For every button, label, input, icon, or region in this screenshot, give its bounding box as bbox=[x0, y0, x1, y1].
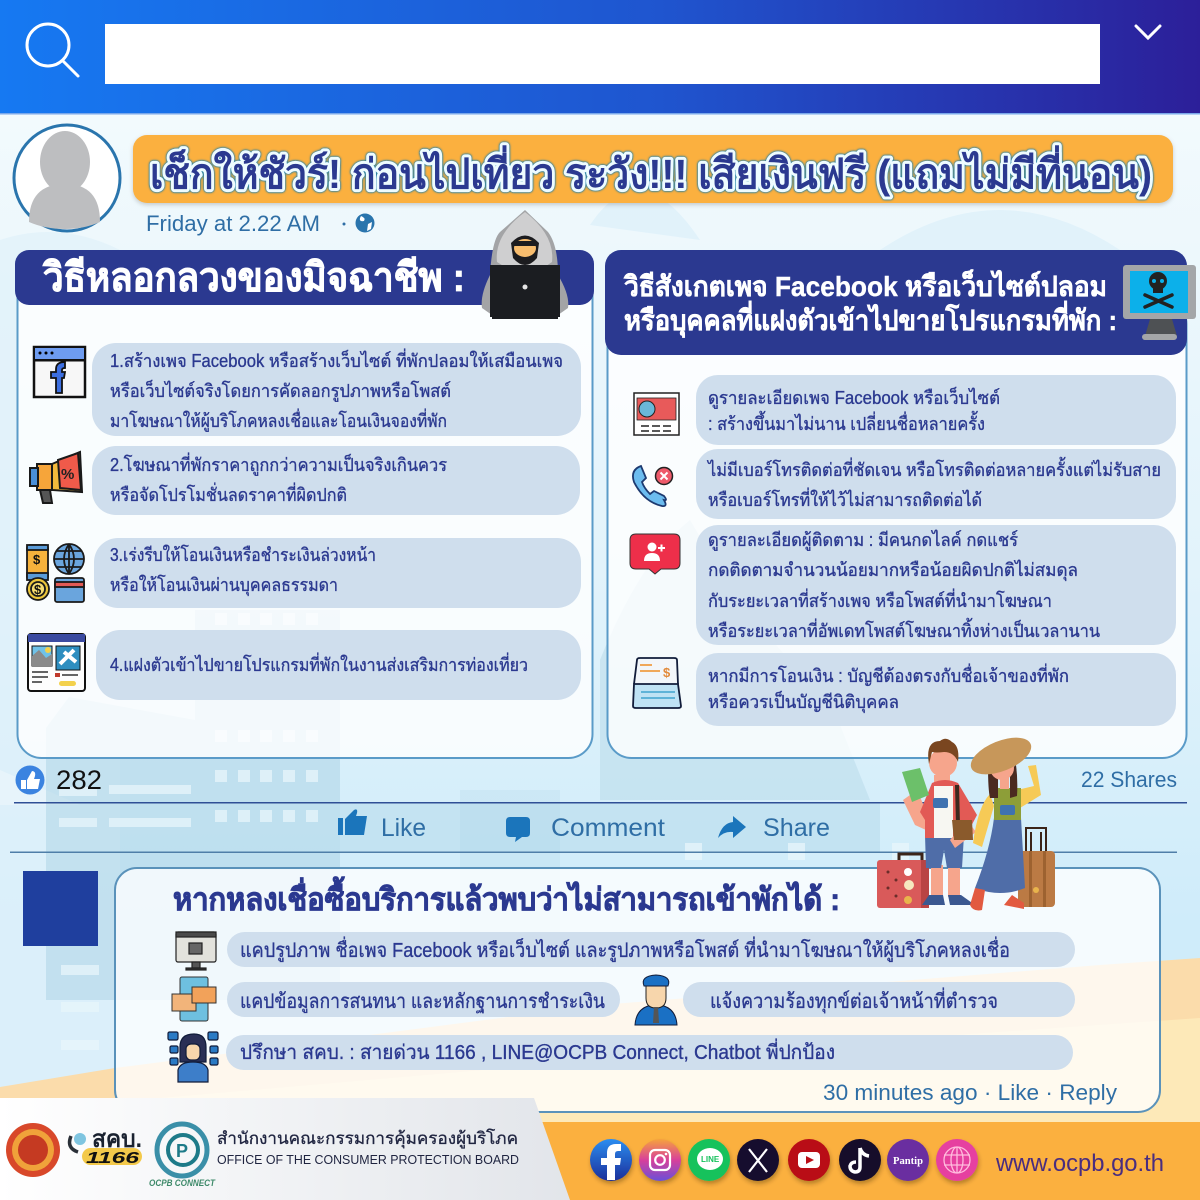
logo: OCPB connect: OCPB CONNECT bbox=[149, 1178, 216, 1188]
step: consult OCPB bbox=[168, 1032, 1073, 1082]
icon: magnifier bbox=[27, 24, 78, 76]
icon: megaphone bbox=[30, 452, 82, 503]
brown suitcase bbox=[1018, 828, 1055, 907]
step: capture images: แคปรูปภาพ ชื่อเพจ Facebook หรือเว็บไซต์ และรูปภาพหรือโพสต์ ที่นำมาโฆษณาให้ผู้บริโภคหลงเชื่อ bbox=[240, 936, 1010, 963]
step: consult OCPB: ปรึกษา สคบ. : สายด่วน 1166 , LINE@OCPB Connect, Chatbot พี่ปกป้อง bbox=[240, 1038, 835, 1064]
item 3: กับระยะเวลาที่สร้างเพจ หรือโพสต์ที่นำมาโฆษณา bbox=[708, 588, 1052, 611]
icon: x bbox=[737, 1139, 779, 1181]
item 3: หรือให้โอนเงินผ่านบุคคลธรรมดา bbox=[110, 574, 338, 596]
agency name bbox=[217, 1128, 519, 1167]
footer: agency strip bbox=[0, 1098, 570, 1200]
action: like bbox=[338, 809, 426, 842]
title banner bbox=[133, 135, 1173, 203]
icon: facebook page bbox=[34, 347, 85, 397]
item 1: มาโฆษณาให้ผู้บริโภคหลงเชื่อและโอนเงินจองที่พัก bbox=[110, 408, 447, 432]
icon: hacker bbox=[482, 210, 568, 319]
reactions row: 282 bbox=[56, 765, 102, 795]
icon: travel website bbox=[28, 634, 85, 691]
item 1 bbox=[634, 375, 1176, 445]
social icons bbox=[590, 1139, 978, 1181]
icon: call agent bbox=[168, 1032, 218, 1082]
icon: youtube bbox=[788, 1139, 830, 1181]
reactions row: 22 Shares bbox=[1081, 767, 1177, 792]
item 1: : สร้างขึ้นมาไม่นาน เปลี่ยนชื่อหลายครั้ง bbox=[708, 411, 985, 434]
item 3 bbox=[27, 538, 581, 608]
panel heading: หรือบุคคลที่แฝงตัวเข้าไปขายโปรแกรมที่พัก : bbox=[624, 300, 1117, 338]
item 3: หรือระยะเวลาที่อัพเดทโพสต์โฆษณาทิ้งห่างเป็นเวลานาน bbox=[708, 618, 1100, 641]
icon: tiktok bbox=[839, 1139, 881, 1181]
icon: skull monitor bbox=[1123, 265, 1196, 340]
item 4: หากมีการโอนเงิน : บัญชีต้องตรงกับชื่อเจ้าของที่พัก bbox=[708, 663, 1069, 686]
item 1: ดูรายละเอียดเพจ Facebook หรือเว็บไซต์ bbox=[708, 386, 1000, 409]
comment meta: 30 minutes ago · Like · Reply bbox=[823, 1080, 1117, 1105]
step: police report bbox=[635, 975, 1075, 1025]
post time: Friday at 2.22 AM bbox=[146, 211, 320, 236]
item 2: หรือจัดโปรโมชั่นลดราคาที่ผิดปกติ bbox=[110, 482, 347, 505]
icon: line: LINE bbox=[701, 1155, 720, 1164]
logo: seal bbox=[6, 1123, 60, 1177]
item 4 bbox=[633, 653, 1176, 726]
logo: OCPB connect bbox=[149, 1124, 216, 1188]
item 4: 4.แฝงตัวเข้าไปขายโปรแกรมที่พักในงานส่งเสริมการท่องเที่ยว bbox=[110, 652, 528, 675]
item 3: 3.เร่งรีบให้โอนเงินหรือชำระเงินล่วงหน้า bbox=[110, 544, 376, 565]
icon: follower alert bbox=[630, 534, 680, 574]
item 3 bbox=[630, 525, 1176, 645]
step: police report: แจ้งความร้องทุกข์ต่อเจ้าหน้าที่ตำรวจ bbox=[710, 987, 998, 1014]
icon: pantip: Pantip bbox=[893, 1156, 923, 1167]
panel heading: วิธีหลอกลวงของมิจฉาชีพ : bbox=[43, 256, 465, 300]
action: like: Like bbox=[381, 814, 426, 842]
icon: screen capture bbox=[176, 932, 216, 970]
item 2 bbox=[30, 446, 580, 515]
panel heading bbox=[15, 250, 594, 305]
panel heading: วิธีสังเกตเพจ Facebook หรือเว็บไซต์ปลอม bbox=[623, 269, 1107, 302]
item 2 bbox=[633, 449, 1176, 519]
agency name: สำนักงานคณะกรรมการคุ้มครองผู้บริโภค bbox=[217, 1128, 518, 1149]
icon: line bbox=[688, 1139, 730, 1181]
action: share bbox=[718, 814, 830, 842]
step: capture chat bbox=[172, 977, 620, 1021]
action: comment: Comment bbox=[551, 814, 665, 842]
step: capture chat: แคปข้อมูลการสนทนา และหลักฐานการชำระเงิน bbox=[240, 991, 605, 1014]
item 3: ดูรายละเอียดผู้ติดตาม : มีคนกดไลค์ กดแชร์ bbox=[708, 529, 1018, 551]
agency name: OFFICE OF THE CONSUMER PROTECTION BOARD bbox=[217, 1152, 519, 1167]
icon: online payment bbox=[27, 544, 84, 602]
reactions row bbox=[16, 765, 1177, 795]
panel heading bbox=[605, 250, 1187, 355]
icon: facebook bbox=[590, 1139, 632, 1181]
man bbox=[902, 739, 977, 905]
item 1: หรือเว็บไซต์จริงโดยการคัดลอกรูปภาพหรือโพสต์ bbox=[110, 379, 451, 402]
panel heading: หากหลงเชื่อซื้อบริการแล้วพบว่าไม่สามารถเข้าพักได้ : bbox=[173, 876, 840, 917]
blue square bbox=[23, 871, 98, 946]
item 4: หรือควรเป็นบัญชีนิติบุคคล bbox=[708, 690, 899, 713]
red suitcase bbox=[877, 854, 929, 908]
footer bbox=[0, 1098, 1200, 1200]
item 3: $ bbox=[33, 552, 41, 567]
icon: chat phone bbox=[172, 977, 216, 1021]
header bar bbox=[0, 0, 1200, 114]
action: comment bbox=[506, 814, 665, 842]
icon: pantip bbox=[887, 1139, 929, 1181]
icon: bank transaction bbox=[633, 658, 681, 708]
panel: how to spot fake pages bbox=[605, 250, 1196, 758]
item 4: $ bbox=[663, 665, 671, 680]
action: share: Share bbox=[763, 814, 830, 842]
icon: phone cross bbox=[633, 466, 672, 506]
item 3: $ bbox=[34, 582, 42, 597]
icon: instagram bbox=[639, 1139, 681, 1181]
icon: like badge bbox=[16, 766, 44, 794]
search box bbox=[105, 24, 1100, 84]
icon: website bbox=[936, 1139, 978, 1181]
step: capture images bbox=[176, 932, 1075, 970]
icon: police officer bbox=[635, 975, 677, 1025]
woman bbox=[966, 730, 1041, 910]
title banner: เช็กให้ชัวร์! ก่อนไปเที่ยว ระวัง!!! เสียเงินฟรี (แถมไม่มีที่นอน) bbox=[150, 145, 1152, 197]
website url: www.ocpb.go.th bbox=[995, 1150, 1164, 1177]
logo: hotline 1166: 1166 bbox=[86, 1150, 139, 1167]
item 2: หรือเบอร์โทรที่ให้ไว้ไม่สามารถติดต่อได้ bbox=[708, 487, 982, 510]
item 1: 1.สร้างเพจ Facebook หรือสร้างเว็บไซต์ ที่พักปลอมให้เสมือนเพจ bbox=[110, 348, 563, 371]
icon: fake web profile bbox=[634, 393, 679, 435]
item 1 bbox=[34, 343, 581, 436]
logo: hotline 1166: สคบ. bbox=[92, 1126, 142, 1153]
item 2: % bbox=[61, 466, 74, 483]
icon: globe bbox=[356, 214, 374, 232]
icon: chevron bbox=[1136, 26, 1160, 38]
panel: what to do if scammed bbox=[115, 868, 1160, 1112]
illustration: travellers bbox=[877, 730, 1055, 910]
item 2: ไม่มีเบอร์โทรติดต่อที่ชัดเจน หรือโทรติดต่อหลายครั้งแต่ไม่รับสาย bbox=[706, 457, 1161, 480]
avatar bbox=[14, 125, 120, 231]
item 3: กดติดตามจำนวนน้อยมากหรือน้อยผิดปกติไม่สมดุล bbox=[708, 559, 1078, 581]
item 2: 2.โฆษณาที่พักราคาถูกกว่าความเป็นจริงเกินควร bbox=[110, 452, 447, 476]
item 4 bbox=[28, 630, 581, 700]
logo: hotline 1166 bbox=[70, 1126, 142, 1167]
panel: scam methods bbox=[15, 210, 594, 758]
logo: OCPB connect: P bbox=[176, 1141, 188, 1161]
